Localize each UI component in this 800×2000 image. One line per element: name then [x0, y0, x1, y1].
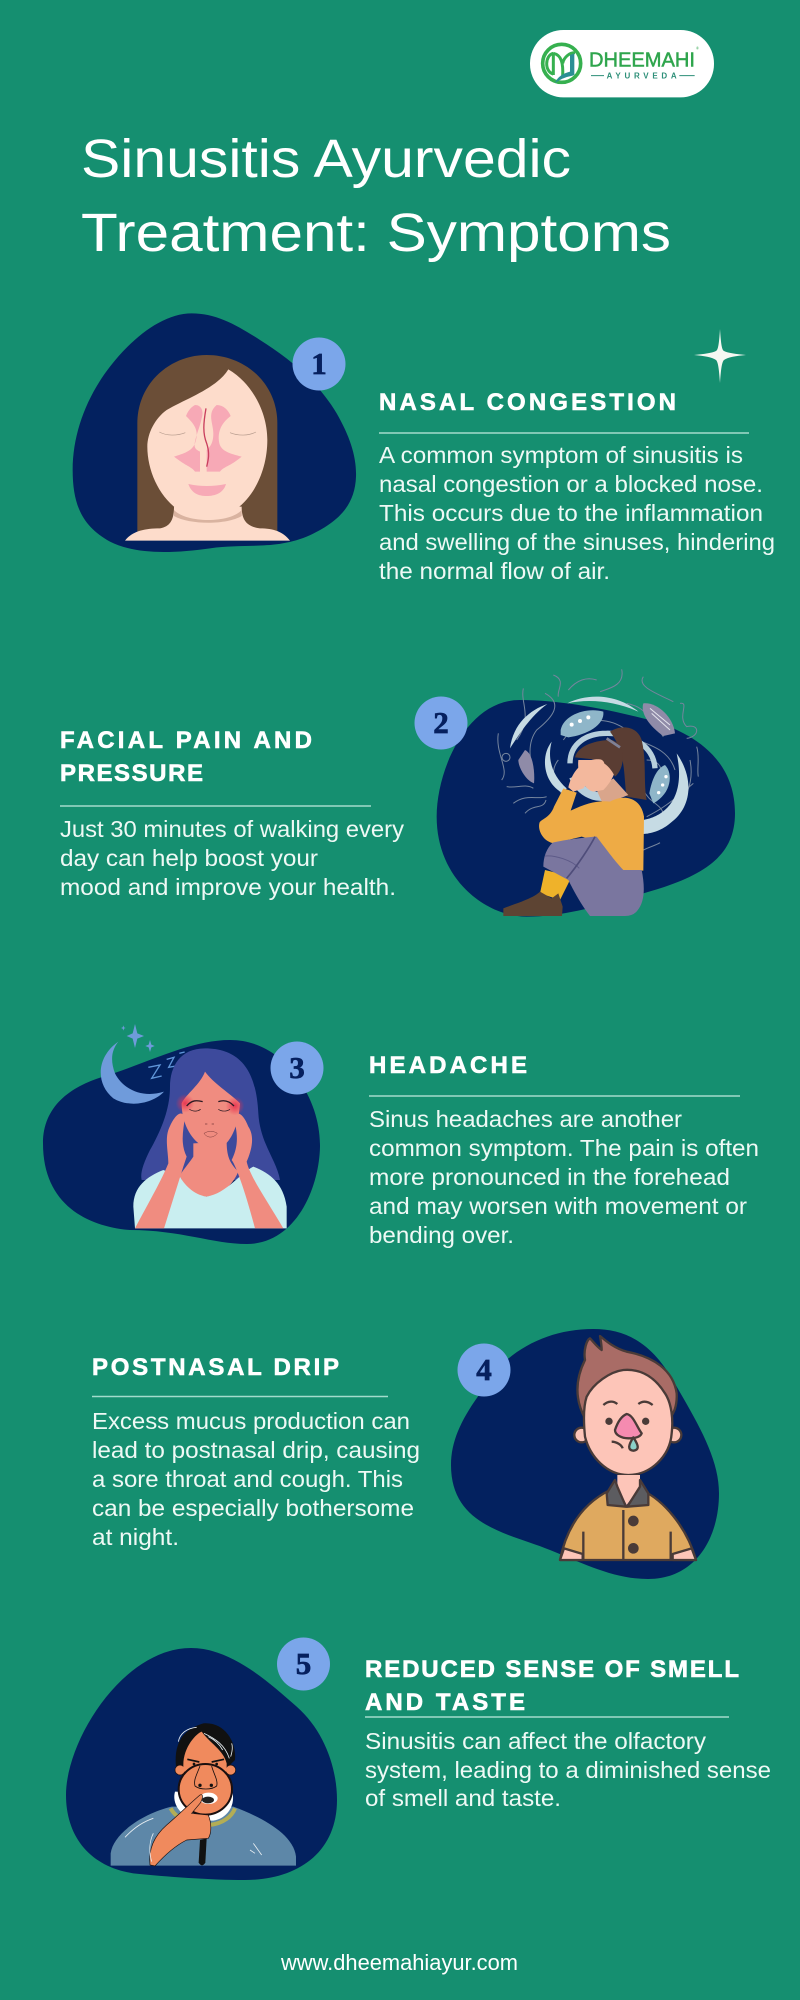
illustration: man with runny nose [451, 1329, 719, 1579]
panel: nasal congestion [73, 313, 775, 584]
heading: facial pain and pressure: FACIAL PAIN AND [60, 727, 312, 754]
badge: number 2 [414, 696, 468, 750]
heading: postnasal drip: POSTNASAL DRIP [92, 1354, 339, 1381]
text: headache description: Sinus headaches are another [369, 1106, 682, 1132]
text: headache description: and may worsen with movement or [369, 1193, 747, 1219]
text: nasal congestion description: and swelling of the sinuses, hindering [379, 529, 775, 555]
illustration: woman with headache and crescent moon [43, 1024, 320, 1244]
text: nasal congestion description: This occurs due to the inflammation [379, 500, 763, 526]
badge: number 3: 3 [289, 1050, 305, 1085]
illustration: woman holding her head, sitting [437, 669, 735, 917]
text: headache description: common symptom. The pain is often [369, 1135, 759, 1161]
heading: reduced sense of smell and taste [365, 1656, 739, 1716]
panel: facial pain and pressure [60, 669, 735, 917]
text: nasal congestion description: the normal flow of air. [379, 558, 610, 584]
icon: sparkle star [694, 329, 746, 383]
panel: headache [43, 1024, 759, 1248]
title: Treatment: Symptoms [81, 203, 671, 263]
badge: number 5 [277, 1638, 330, 1690]
badge: number 1 [292, 338, 346, 390]
text: nasal congestion description: nasal congestion or a blocked nose. [379, 471, 763, 497]
text: facial pain description: mood and improve your health. [60, 874, 396, 900]
text: nasal congestion description: A common symptom of sinusitis is [379, 442, 743, 468]
panel: reduced sense of smell and taste [66, 1638, 771, 1880]
text: postnasal drip description: at night. [92, 1524, 179, 1550]
text: facial pain description: Just 30 minutes of walking every [60, 816, 405, 842]
text: headache description [369, 1106, 759, 1248]
badge: number 4: 4 [476, 1352, 492, 1387]
badge: number 2: 2 [433, 705, 449, 740]
text: facial pain description: day can help boost your [60, 845, 318, 871]
text: reduced smell description: system, leading to a diminished sense [365, 1757, 771, 1783]
badge: number 5: 5 [296, 1646, 311, 1681]
text: reduced smell description: of smell and taste. [365, 1785, 561, 1811]
heading: headache: HEADACHE [369, 1052, 527, 1079]
illustration: woman with highlighted sinuses [73, 313, 356, 552]
logo: Dheemahi Ayurveda: DHEEMAHI [589, 49, 695, 72]
heading: facial pain and pressure: PRESSURE [60, 760, 203, 787]
text: headache description: more pronounced in the forehead [369, 1164, 730, 1190]
badge: number 4 [458, 1344, 510, 1396]
title: Sinusitis Ayurvedic [81, 129, 571, 189]
text: postnasal drip description: Excess mucus production can [92, 1408, 410, 1434]
heading: reduced sense of smell and taste: REDUCED SENSE OF SMELL [365, 1656, 739, 1683]
text: postnasal drip description [92, 1408, 420, 1550]
logo: Dheemahi Ayurveda: ® [696, 45, 699, 50]
text: reduced smell description [365, 1728, 771, 1811]
text: reduced smell description: Sinusitis can affect the olfactory [365, 1728, 707, 1754]
illustration: man with finger at his mouth [66, 1648, 337, 1880]
footer: website: www.dheemahiayur.com [280, 1950, 518, 1975]
panel: postnasal drip [92, 1329, 719, 1579]
text: nasal congestion description [379, 442, 775, 584]
heading: nasal congestion: NASAL CONGESTION [379, 389, 676, 416]
badge: number 1: 1 [311, 346, 327, 381]
heading: reduced sense of smell and taste: AND TASTE [365, 1689, 525, 1716]
text: postnasal drip description: a sore throat and cough. This [92, 1466, 403, 1492]
logo: Dheemahi Ayurveda: AYURVEDA [607, 72, 677, 81]
text: postnasal drip description: lead to postnasal drip, causing [92, 1437, 420, 1463]
badge: number 3 [270, 1042, 324, 1094]
heading: facial pain and pressure [60, 727, 312, 787]
text: postnasal drip description: can be especially bothersome [92, 1495, 414, 1521]
title [81, 129, 671, 263]
text: facial pain description [60, 816, 405, 900]
text: headache description: bending over. [369, 1222, 514, 1248]
logo: Dheemahi Ayurveda [530, 30, 714, 97]
